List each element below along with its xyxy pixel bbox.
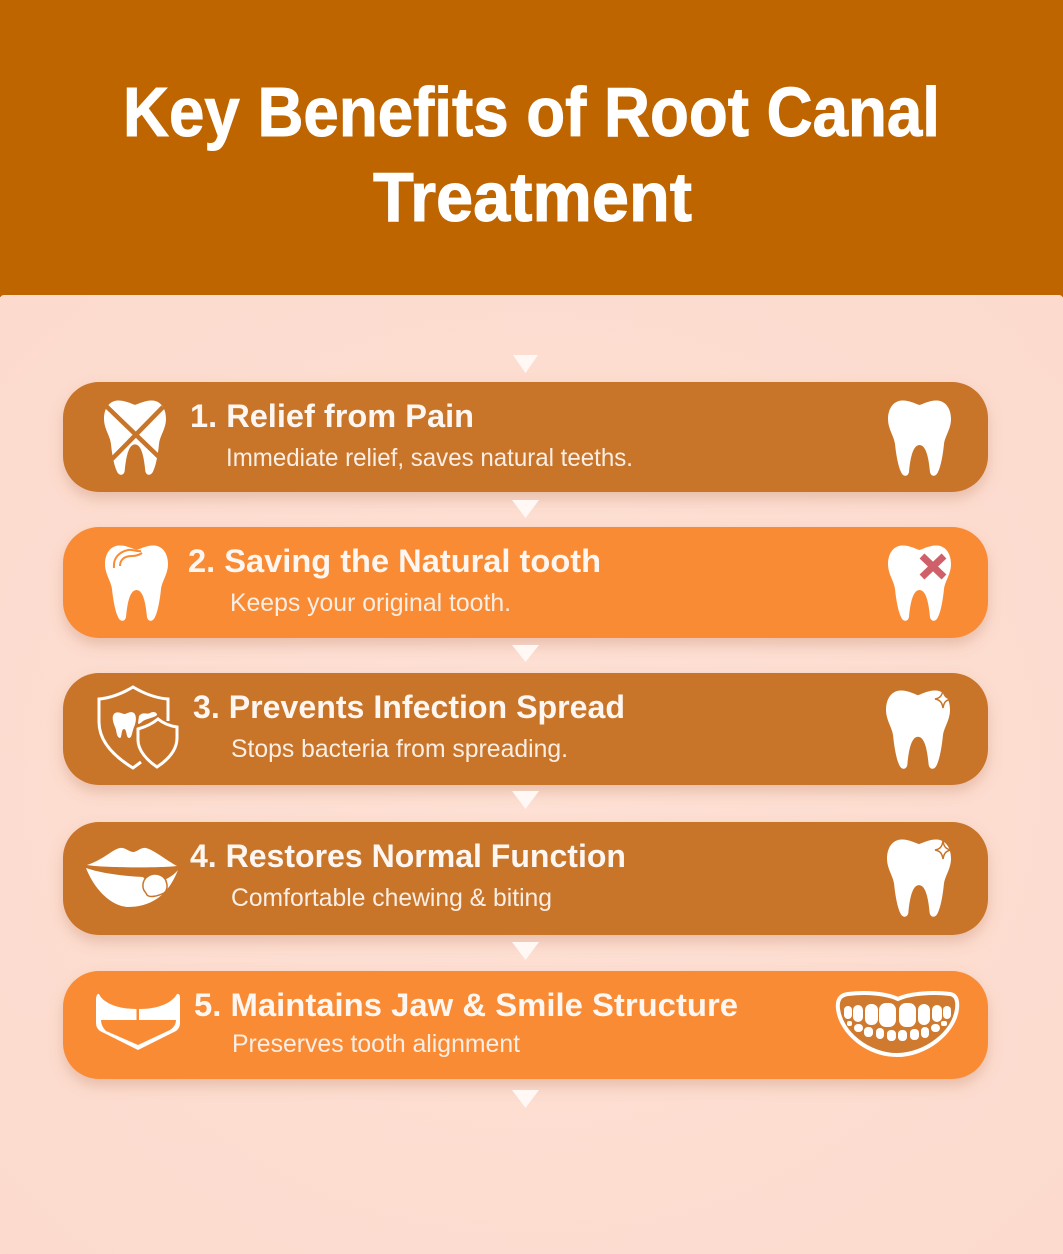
icon: jaw guard — [96, 994, 180, 1050]
icon: sparkling tooth — [887, 839, 951, 917]
description: Stops bacteria from spreading. — [231, 735, 568, 763]
icon: shields with tooth — [99, 687, 177, 768]
title: Key Benefits of Root Canal — [123, 73, 940, 151]
arrow: bottom — [512, 1090, 539, 1108]
arrow: top — [513, 355, 538, 373]
panel: benefit 1 — [63, 382, 988, 492]
panel: benefit 3 — [63, 673, 988, 785]
icon: tooth with highlight — [105, 545, 168, 621]
heading: 3. Prevents Infection Spread — [193, 689, 625, 725]
icon: sparkling tooth — [886, 690, 951, 769]
arrow: 3 to 4 — [512, 791, 539, 809]
heading: 4. Restores Normal Function — [190, 838, 626, 874]
description: Preserves tooth alignment — [232, 1030, 520, 1058]
panel: benefits background — [0, 295, 1063, 1254]
description: Comfortable chewing & biting — [231, 884, 552, 912]
arrow: 2 to 3 — [512, 645, 539, 662]
panel: benefit 2 — [63, 527, 988, 638]
panel: benefit 5 — [63, 971, 988, 1079]
description: Immediate relief, saves natural teeths. — [226, 444, 633, 472]
title: Treatment — [373, 158, 692, 236]
title — [123, 73, 940, 236]
heading: 2. Saving the Natural tooth — [188, 543, 601, 579]
panel: benefit 4 — [63, 822, 988, 935]
icon: healthy tooth — [888, 400, 951, 476]
heading: 5. Maintains Jaw & Smile Structure — [194, 987, 738, 1023]
arrow: 1 to 2 — [512, 500, 539, 518]
icon: smiling lips — [86, 848, 178, 907]
icon: full smile — [838, 993, 957, 1055]
header banner — [0, 0, 1063, 297]
heading: 1. Relief from Pain — [190, 398, 474, 434]
icon: crossed tooth — [104, 400, 166, 475]
arrow: 4 to 5 — [512, 942, 539, 960]
description: Keeps your original tooth. — [230, 589, 511, 617]
icon: damaged tooth — [888, 545, 951, 621]
